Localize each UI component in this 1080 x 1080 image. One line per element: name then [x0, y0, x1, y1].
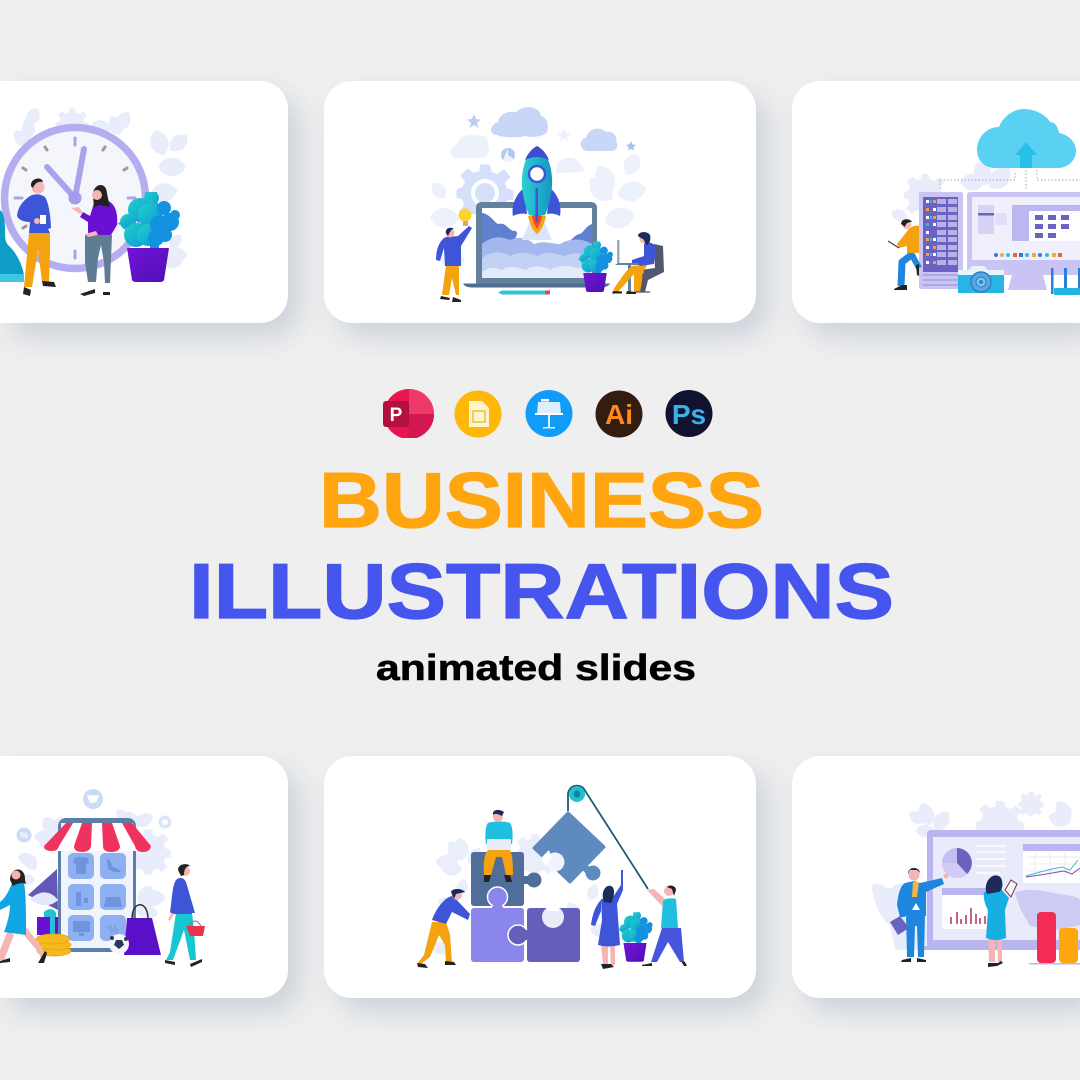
jigsaw piece: bottom left: [471, 887, 524, 962]
icon: Photoshop: Ps: [672, 399, 706, 430]
icon: Google Slides: [454, 390, 502, 438]
figure: woman in purple: [71, 185, 117, 296]
icon: potted plant: [618, 912, 653, 962]
figure: woman reaching up: [591, 870, 623, 969]
icon row: software logos: [383, 389, 712, 438]
figure: man pushing puzzle: [417, 889, 470, 968]
background foliage and floating badges: [16, 789, 171, 921]
jigsaw piece: hanging rotated: [534, 813, 604, 882]
icon: striped awning: [44, 823, 151, 852]
figure: man pulling rope: [642, 886, 687, 966]
icon: megaphone and gift: [28, 869, 58, 935]
icon: teal bell at left edge: [0, 210, 24, 282]
figure: woman with tablet: [984, 875, 1017, 967]
icon: Illustrator: Ai: [605, 399, 633, 430]
panel: online store illustration card: [0, 756, 288, 998]
subtitle: animated slides: animated slides: [376, 648, 696, 688]
icon: pencil: [498, 290, 550, 294]
icon: Photoshop: [666, 390, 712, 437]
server rack: [919, 192, 963, 289]
phone storefront: %: [107, 922, 119, 937]
figure: woman walking: [0, 870, 47, 963]
jigsaw piece: bottom right: [508, 906, 580, 962]
figure: man sitting on puzzle with laptop: [484, 810, 513, 882]
icon: shopping bag: [124, 905, 161, 955]
icon: rocket: [513, 146, 561, 240]
icon: soccer ball: [109, 934, 129, 954]
icon: coin stack: [36, 934, 71, 956]
icon: router: [1051, 268, 1080, 295]
icon: Illustrator: [596, 390, 642, 438]
background foliage and gears: [872, 791, 1076, 950]
panel: cloud server illustration card: [792, 81, 1080, 323]
icon: PowerPoint: P: [390, 405, 403, 426]
figure: man working at desk: [612, 232, 664, 294]
panel: jigsaw teamwork illustration card: [324, 756, 756, 998]
icon: upload cloud: [977, 109, 1076, 168]
desktop monitor: [967, 192, 1080, 290]
icon: camera: [958, 266, 1004, 293]
laptop with clouds on screen: [463, 202, 610, 288]
pie chart: [942, 848, 972, 878]
jigsaw piece: top left: [471, 852, 542, 906]
clouds and stars: [450, 107, 636, 173]
panel: clock illustration card: [0, 81, 288, 323]
decorative foliage behind clock: [9, 105, 192, 271]
panel: rocket launch illustration card: [324, 81, 756, 323]
phone storefront: [58, 818, 136, 952]
background foliage and floating badges: %: [20, 830, 28, 840]
figure: man with cup: [17, 179, 56, 296]
dashboard screen: [922, 830, 1080, 950]
icon: PowerPoint: [383, 389, 434, 439]
pulley and rope: [568, 786, 648, 889]
figure: man in blue suit pointing: [890, 868, 948, 962]
figure: man holding light bulb: [436, 208, 472, 302]
figure: man with basket: [165, 864, 205, 967]
background foliage and dotted links: [889, 159, 1080, 223]
icon: potted plant: [578, 242, 613, 292]
icon: Keynote: [526, 390, 572, 437]
icon: potted plant: [117, 192, 180, 282]
background foliage: [430, 834, 610, 955]
figure: man with tablet: [888, 219, 919, 290]
bar chart: [1029, 912, 1080, 964]
icon: wall clock: [4, 128, 146, 268]
background foliage: [427, 148, 649, 268]
panel: analytics dashboard illustration card: [792, 756, 1080, 998]
